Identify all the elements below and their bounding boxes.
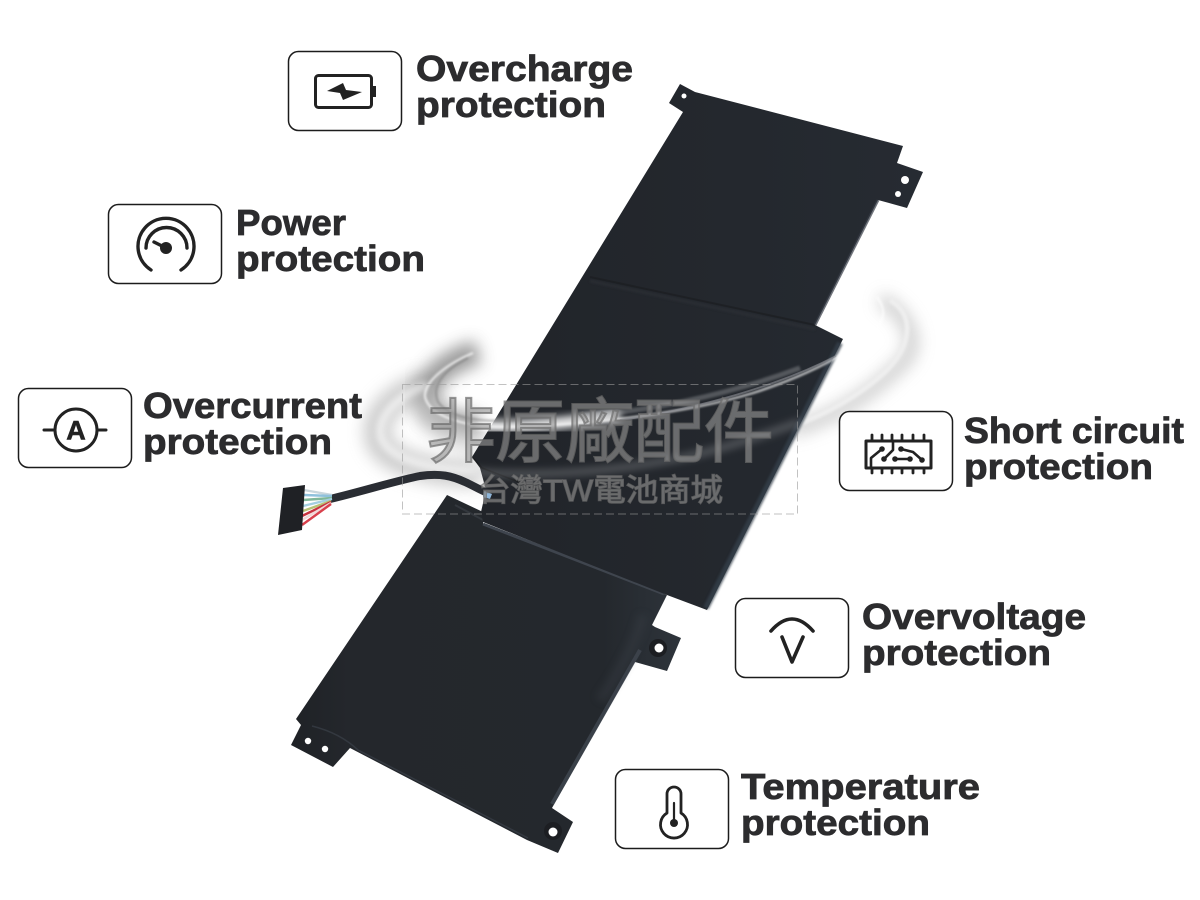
label: protection bbox=[862, 632, 1051, 673]
label bbox=[143, 385, 362, 462]
watermark sub text: 台灣TW電池商城 bbox=[478, 473, 723, 508]
label: Temperature bbox=[741, 766, 980, 807]
callout: short circuit protection bbox=[840, 410, 1184, 490]
lower battery cell bbox=[291, 495, 681, 853]
icon: voltage bbox=[736, 598, 848, 678]
label bbox=[964, 410, 1184, 487]
icon: ammeter: A bbox=[66, 416, 86, 446]
label: Power bbox=[236, 202, 346, 243]
swirl halo behind battery bbox=[377, 300, 911, 474]
swirl highlight over battery bbox=[425, 297, 883, 474]
watermark frame bbox=[402, 384, 798, 514]
callout: overvoltage protection bbox=[736, 596, 1086, 678]
ribbon cable and connector bbox=[278, 475, 492, 535]
icon: gauge bbox=[108, 204, 222, 284]
label bbox=[741, 766, 980, 843]
callout: overcharge protection bbox=[288, 48, 633, 130]
label bbox=[236, 202, 425, 279]
icon: thermometer bbox=[616, 770, 728, 848]
label: protection bbox=[143, 421, 332, 462]
label bbox=[862, 596, 1086, 673]
callout: power protection bbox=[108, 202, 425, 284]
label: protection bbox=[741, 802, 930, 843]
label: Overcurrent bbox=[143, 385, 362, 426]
label: protection bbox=[964, 446, 1153, 487]
label: Short circuit bbox=[964, 410, 1184, 451]
label bbox=[416, 48, 633, 125]
watermark main text: 非原廠配件 bbox=[426, 393, 774, 471]
icon: battery charge bbox=[288, 52, 402, 130]
icon: ammeter bbox=[18, 388, 132, 468]
battery pack photo bbox=[278, 84, 923, 853]
label: protection bbox=[416, 84, 606, 125]
label: protection bbox=[236, 238, 425, 279]
icon: circuit chip bbox=[840, 412, 952, 490]
label: Overcharge bbox=[416, 48, 633, 89]
upper battery cell bbox=[472, 84, 923, 610]
callout: temperature protection bbox=[616, 766, 980, 848]
label: Overvoltage bbox=[862, 596, 1086, 637]
watermark bbox=[402, 384, 798, 514]
callout: overcurrent protection bbox=[18, 385, 362, 468]
